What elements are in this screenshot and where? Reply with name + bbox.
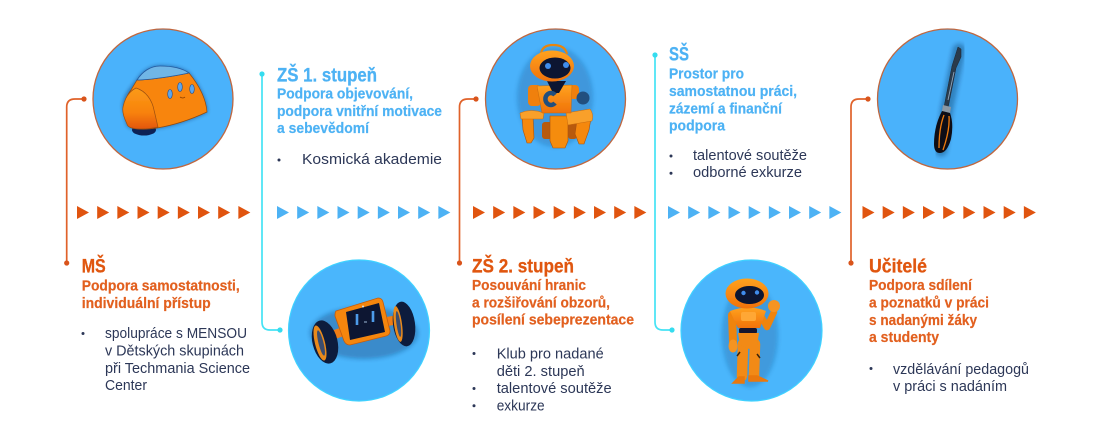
icon: wheeled robot in circle bbox=[288, 260, 430, 401]
subheading: ZŠ 2: a rozšiřování obzorů, bbox=[472, 296, 610, 312]
subheading: MŠ bbox=[82, 279, 240, 312]
heading: Učitelé: Učitelé bbox=[869, 256, 927, 277]
list: SŠ: odborné exkurze bbox=[693, 164, 802, 181]
subheading: Učitelé: s nadanými žáky bbox=[869, 313, 977, 329]
list: MŠ: Center bbox=[105, 377, 147, 394]
subheading: ZŠ 2: posílení sebeprezentace bbox=[472, 313, 634, 329]
heading: ZŠ 1. stupeň: ZŠ 1. stupeň bbox=[277, 65, 377, 87]
list: SŠ: talentové soutěže bbox=[693, 147, 807, 164]
subheading: ZŠ 2 bbox=[472, 278, 634, 329]
list: MŠ: v Dětských skupinách bbox=[105, 343, 244, 360]
subheading: MŠ: Podpora samostatnosti, bbox=[82, 279, 240, 295]
list: ZŠ 2 bbox=[472, 346, 612, 415]
list: ZŠ 2: Klub pro nadané bbox=[497, 346, 604, 363]
subheading: Učitelé: a poznatků v práci bbox=[869, 296, 989, 312]
subheading: ZŠ 2: Posouvání hranic bbox=[472, 278, 586, 294]
list: Učitelé: vzdělávání pedagogů bbox=[893, 361, 1029, 378]
list: ZŠ 2: exkurze bbox=[497, 398, 545, 415]
heading: ZŠ 2. stupeň: ZŠ 2. stupeň bbox=[472, 256, 574, 278]
list: MŠ bbox=[82, 325, 250, 394]
connector: ZŠ 1 bbox=[259, 71, 283, 333]
subheading: ZŠ 1: podpora vnitřní motivace bbox=[277, 104, 442, 120]
subheading: ZŠ 1: a sebevědomí bbox=[277, 121, 370, 137]
list: MŠ: při Techmania Science bbox=[105, 360, 250, 377]
connector: Učitelé bbox=[848, 96, 871, 266]
subheading: ZŠ 1 bbox=[277, 87, 442, 137]
connector: ZŠ 2 bbox=[457, 96, 479, 266]
list: ZŠ 1: Kosmická akademie bbox=[302, 151, 442, 168]
panel: Učitelé bbox=[848, 29, 1036, 395]
panel: MŠ bbox=[64, 29, 250, 394]
list: Učitelé bbox=[870, 361, 1029, 395]
list: ZŠ 2: talentové soutěže bbox=[497, 380, 612, 397]
heading: MŠ: MŠ bbox=[82, 256, 106, 278]
arrows: Učitelé bbox=[862, 206, 1036, 219]
subheading: SŠ: podpora bbox=[669, 119, 726, 135]
icon: spider robot in circle bbox=[486, 29, 626, 169]
panel: ZŠ 1. stupeň bbox=[259, 65, 450, 401]
arrows: ZŠ 1 bbox=[277, 206, 450, 219]
icon: humanoid robot in circle bbox=[681, 260, 822, 401]
icon: egg robot in circle bbox=[93, 29, 233, 169]
list: Učitelé: v práci s nadáním bbox=[893, 378, 1007, 395]
heading: SŠ: SŠ bbox=[669, 44, 689, 66]
icon: screwdriver in circle bbox=[878, 29, 1018, 169]
arrows: MŠ bbox=[77, 206, 250, 219]
panel: SŠ bbox=[652, 44, 841, 401]
subheading: SŠ: Prostor pro bbox=[669, 67, 744, 83]
subheading: ZŠ 1: Podpora objevování, bbox=[277, 87, 413, 103]
connector: SŠ bbox=[652, 52, 675, 333]
subheading: MŠ: individuální přístup bbox=[82, 296, 211, 312]
list: ZŠ 2: děti 2. stupeň bbox=[497, 363, 585, 380]
subheading: SŠ bbox=[669, 67, 797, 135]
connector: MŠ bbox=[64, 96, 87, 266]
panel: ZŠ 2. stupeň bbox=[457, 29, 646, 415]
arrows: SŠ bbox=[668, 206, 841, 219]
arrows: ZŠ 2 bbox=[473, 206, 646, 219]
list: MŠ: spolupráce s MENSOU bbox=[105, 325, 247, 342]
subheading: Učitelé: Podpora sdílení bbox=[869, 278, 973, 294]
subheading: SŠ: samostatnou práci, bbox=[669, 84, 797, 100]
subheading: Učitelé bbox=[869, 278, 989, 346]
subheading: SŠ: zázemí a finanční bbox=[669, 101, 783, 117]
subheading: Učitelé: a studenty bbox=[869, 330, 939, 346]
list: SŠ bbox=[670, 147, 807, 181]
